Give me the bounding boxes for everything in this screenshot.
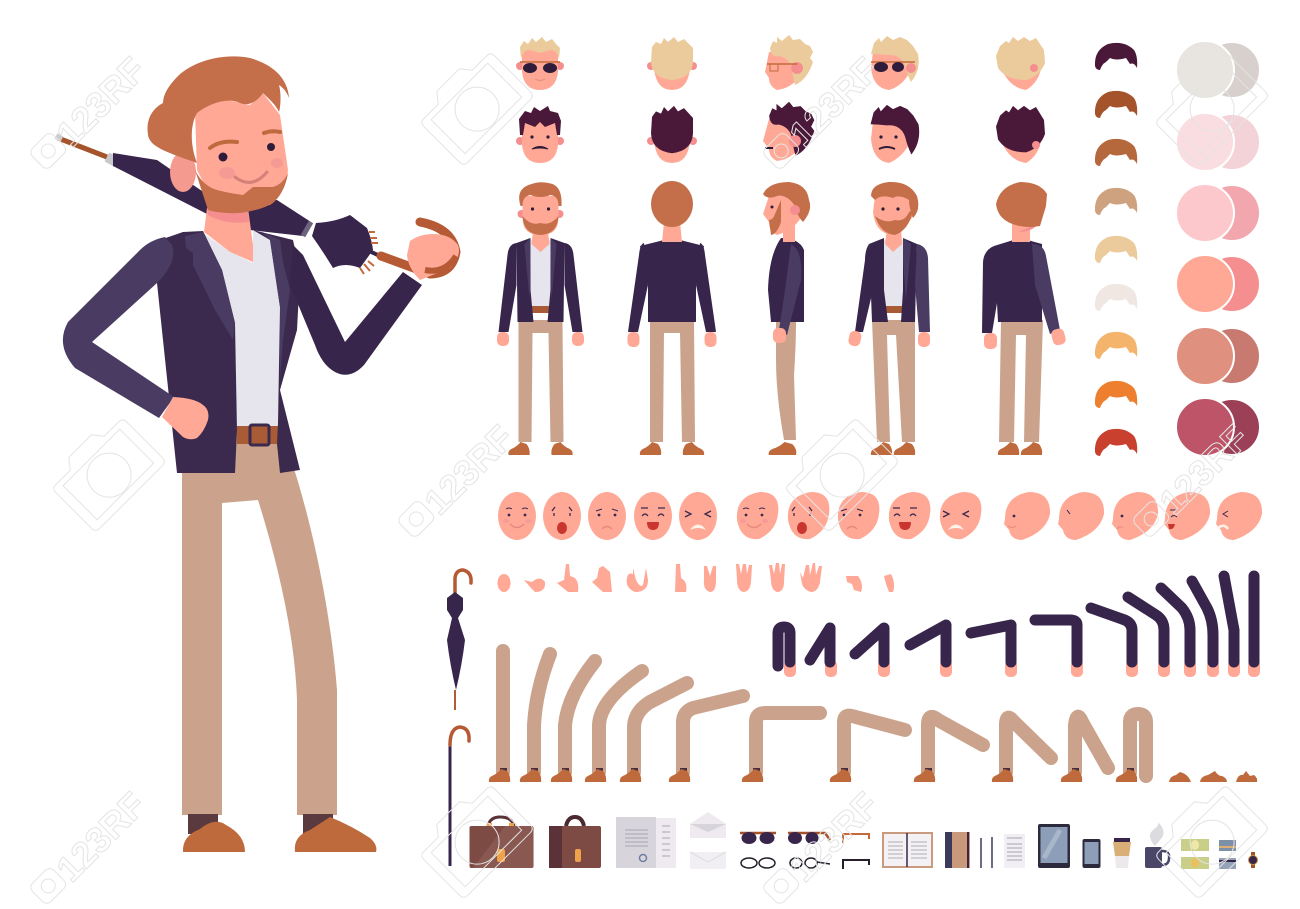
dark head back: [647, 106, 697, 163]
standing figure rear quarter: [982, 182, 1067, 455]
blond head front: [516, 37, 564, 90]
leg poses: [489, 651, 1146, 782]
main figure jacket: [157, 230, 300, 473]
mug with steam: [1145, 822, 1169, 868]
blond head profile: [765, 35, 813, 90]
blond head three quarter: [871, 36, 919, 90]
documents: [616, 817, 676, 868]
main figure legs: [182, 430, 337, 815]
blond head back: [647, 37, 697, 90]
brown briefcase: [470, 817, 534, 868]
main figure left hand: [162, 397, 208, 439]
main figure umbrella: [56, 136, 456, 274]
main figure shoes: [183, 814, 376, 852]
row of blond heads: [516, 35, 1045, 90]
arm poses: [778, 576, 1260, 677]
bank cards: [1219, 840, 1236, 869]
main figure: man with umbrella: [56, 56, 459, 852]
hair colour swatches: [1095, 43, 1137, 456]
tablet: [1038, 824, 1070, 868]
dark head rear quarter: [996, 106, 1045, 163]
hand poses: [498, 563, 894, 592]
main figure belt: [237, 425, 278, 445]
standing figure back: [628, 181, 716, 455]
main figure left sleeve: [63, 237, 174, 418]
standing figure side: [763, 182, 810, 455]
open notebook: [882, 832, 933, 868]
reading glasses: [741, 858, 869, 869]
main figure shirt: [203, 230, 280, 427]
wristwatch: [1248, 852, 1258, 868]
dark head three quarter: [871, 105, 919, 163]
watermarks: 123RF: [781, 49, 887, 155]
watermarks: 123RF: [1151, 417, 1257, 523]
closed umbrella: [447, 570, 471, 710]
dark briefcase: [549, 817, 601, 868]
separate shoes: [1169, 771, 1257, 782]
side face expressions: [1004, 492, 1262, 540]
envelopes: [690, 812, 726, 869]
watermarks: 123RF: [416, 417, 522, 523]
watermarks: 123RF: [781, 784, 887, 890]
phone: [1082, 839, 1100, 868]
front face expressions: [498, 492, 717, 540]
notepad: [1004, 834, 1025, 868]
banknotes: [1181, 839, 1209, 869]
standing figure front: [497, 182, 584, 455]
three quarter face expressions: [737, 492, 981, 539]
coffee cup: [1113, 838, 1131, 868]
dark head front: [516, 106, 564, 163]
main figure right sleeve: [290, 245, 422, 375]
watermarks: 123RF: [48, 784, 154, 890]
dark head profile: [763, 102, 814, 161]
closed notebook: [945, 832, 970, 868]
sunglasses: [740, 832, 869, 844]
pen and pencil: [981, 837, 992, 868]
skin colour swatches: [1176, 41, 1260, 456]
blond head rear quarter: [996, 37, 1045, 90]
watermarks: 123RF: [48, 49, 154, 155]
main figure right hand: [407, 234, 459, 280]
row of dark haired heads: [516, 102, 1045, 163]
main figure head: [148, 56, 289, 262]
standing figure three quarter: [847, 182, 930, 455]
walking cane: [450, 727, 469, 866]
